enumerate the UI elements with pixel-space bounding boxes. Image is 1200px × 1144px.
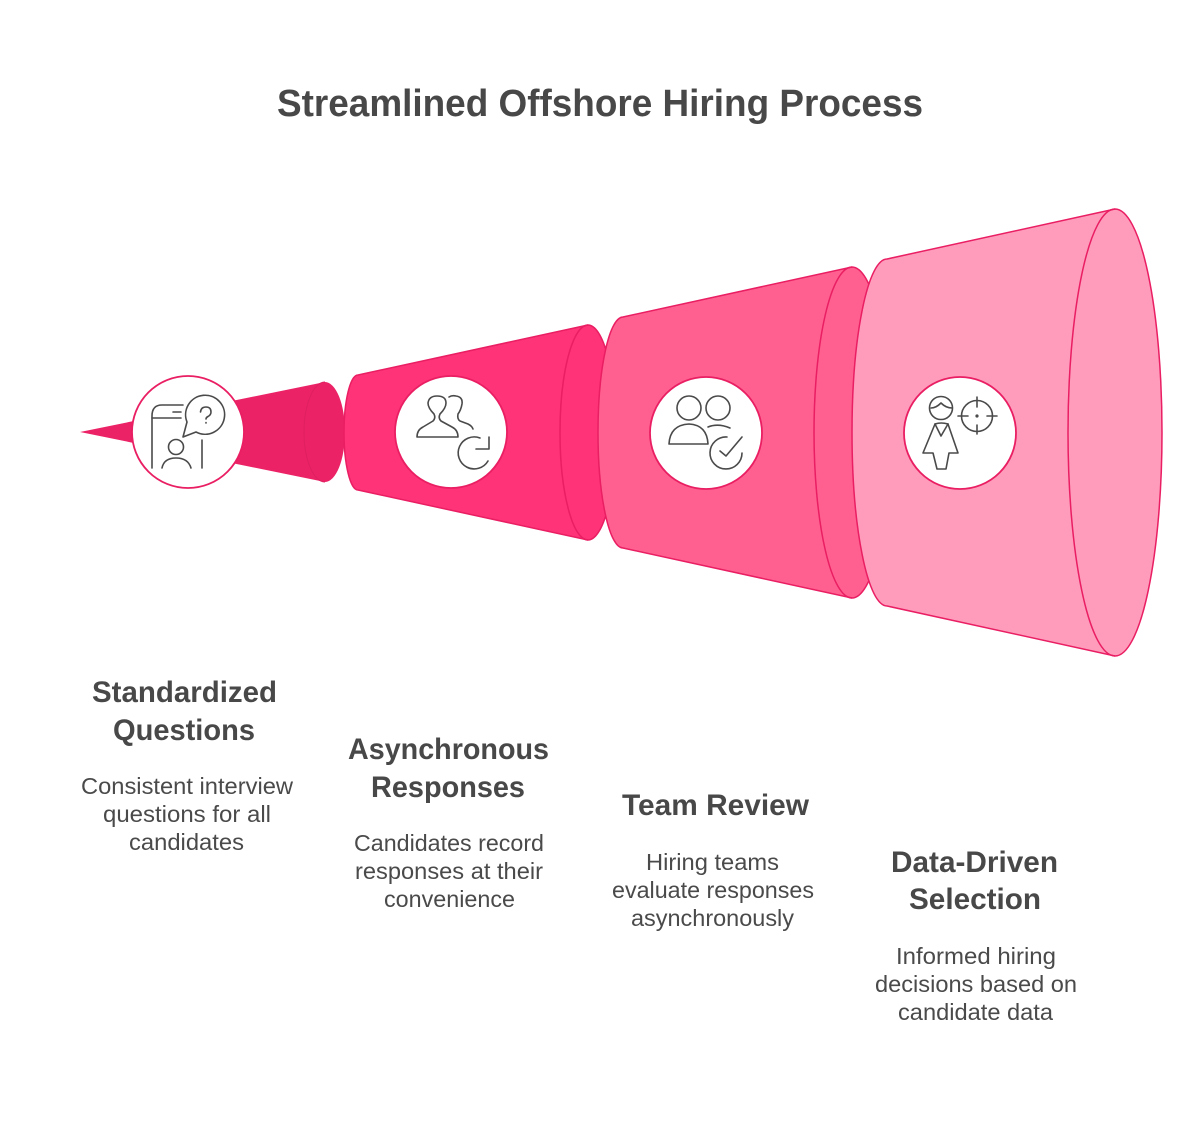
text block: asynchronous responses [348,733,549,912]
text block: asynchronous responses: Responses [371,771,525,804]
text block: data-driven selection: Selection [909,883,1041,916]
text block: standardized questions: candidates [129,829,244,855]
text block: data-driven selection: Data-Driven [891,846,1058,879]
icon badge: phone with question bubble [132,376,244,488]
text block: data-driven selection: candidate data [898,999,1053,1025]
icon badge: people with refresh arrow [395,376,507,488]
title: Streamlined Offshore Hiring Process [277,83,923,125]
text block: standardized questions [81,676,293,855]
funnel stage 2: asynchronous responses cone [344,325,616,540]
text block: data-driven selection [875,846,1077,1025]
text block: asynchronous responses: convenience [384,886,515,912]
text block: standardized questions: Consistent interview [81,773,293,799]
icon badge: person with target [904,377,1016,489]
text block: standardized questions: Standardized [92,676,277,709]
text block: standardized questions: Questions [113,714,255,747]
text block: team review: asynchronously [631,905,795,931]
text block: asynchronous responses: responses at their [355,858,543,884]
text block: team review [612,789,814,931]
text block: team review: evaluate responses [612,877,814,903]
text block: asynchronous responses: Asynchronous [348,733,549,766]
funnel stage 1: standardized questions cone [80,382,345,482]
icon badge: people with check mark [650,377,762,489]
text block: data-driven selection: Informed hiring [896,943,1056,969]
text block: asynchronous responses: Candidates record [354,830,544,856]
text block: team review: Team Review [622,789,810,822]
funnel stage 3: team review cone [598,267,890,598]
funnel stage 4: data-driven selection cone [852,209,1162,656]
text block: team review: Hiring teams [646,849,779,875]
text block: data-driven selection: decisions based on [875,971,1077,997]
text block: standardized questions: questions for all [103,801,271,827]
